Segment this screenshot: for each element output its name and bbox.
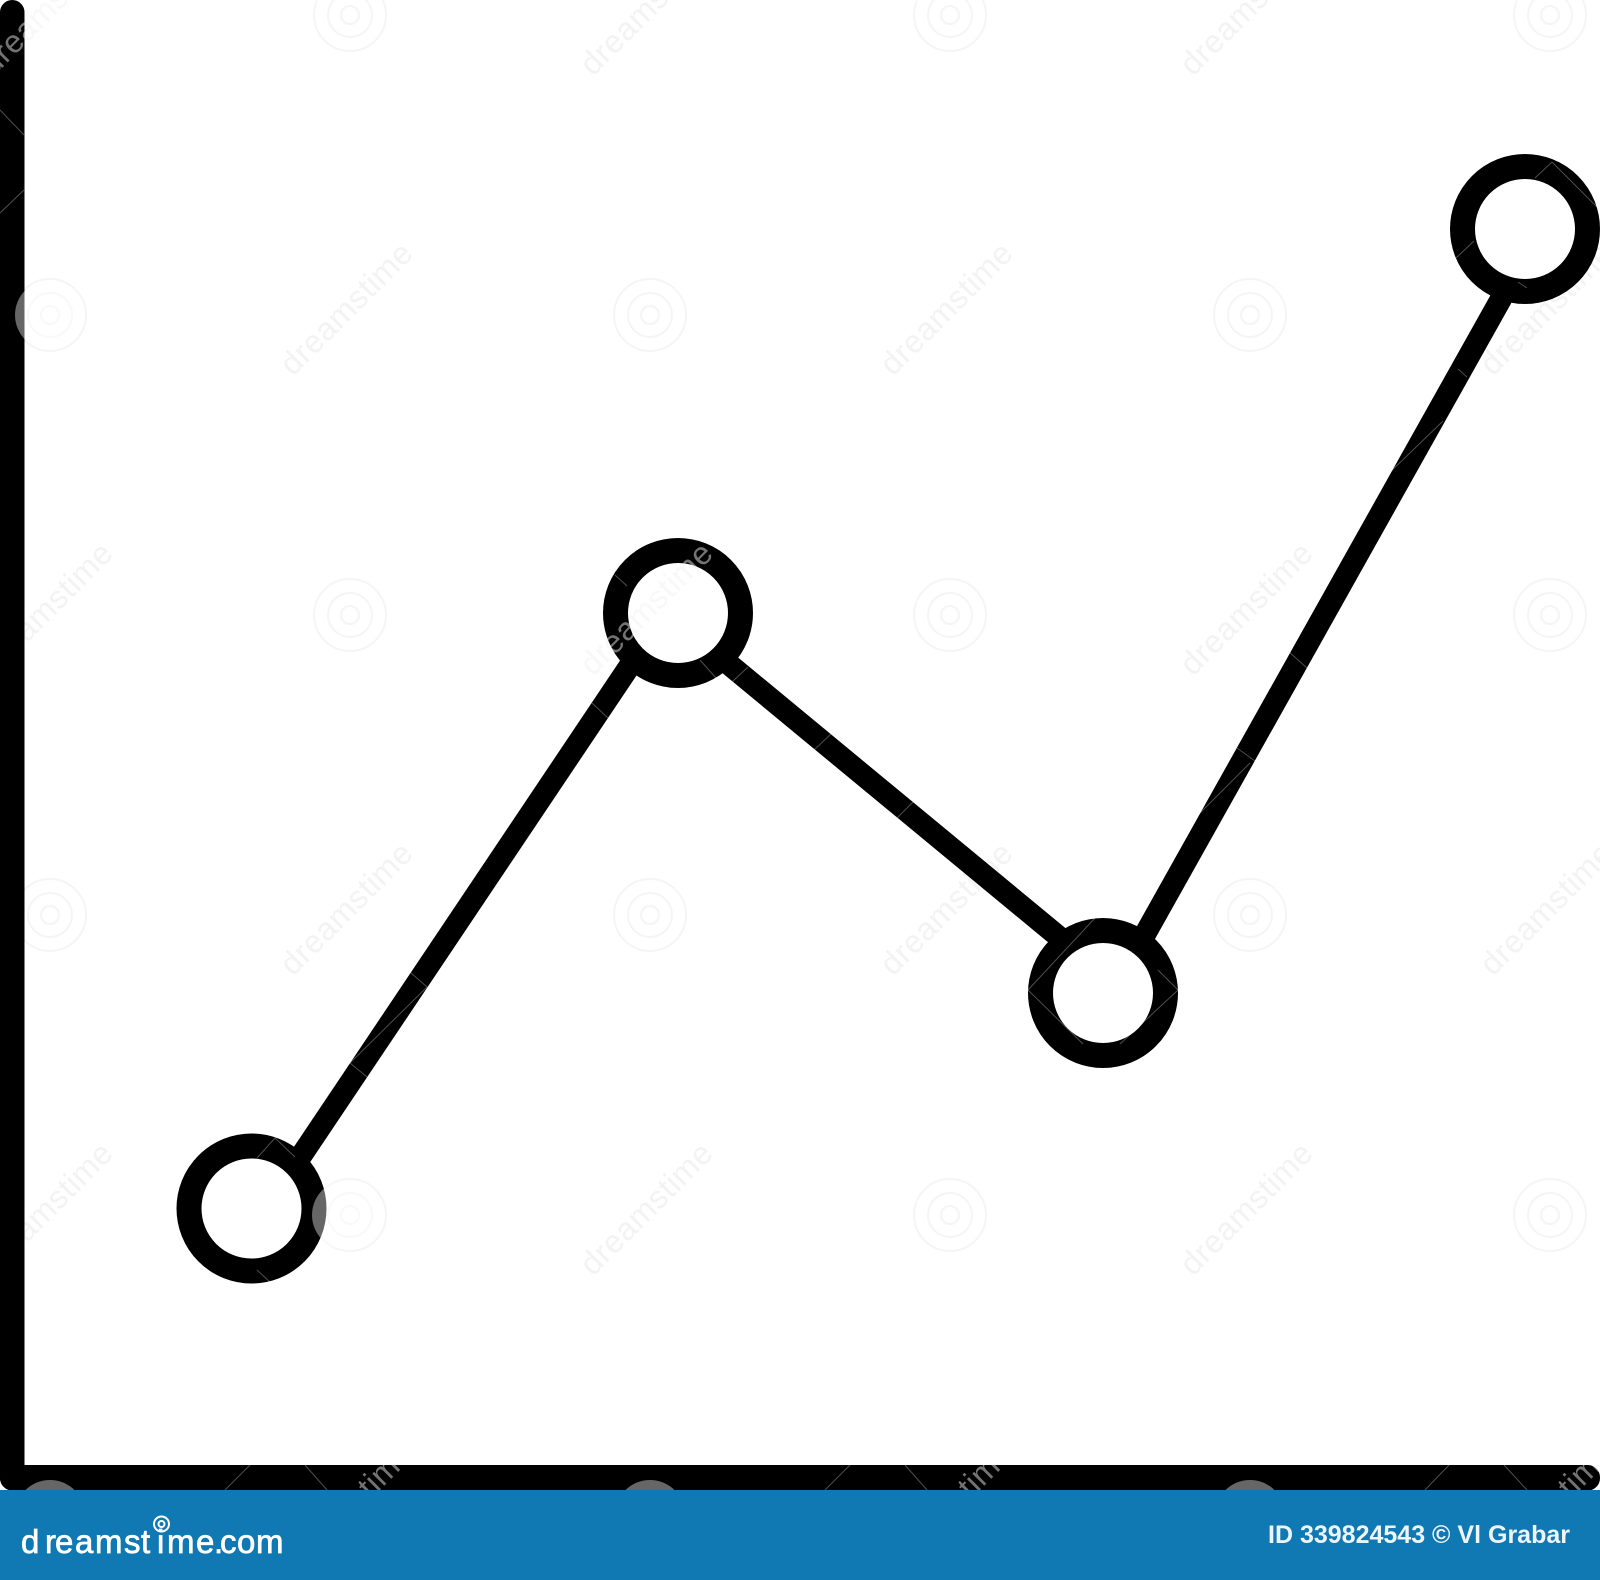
bottom banner: [0, 1490, 1600, 1580]
data line: [295, 290, 1506, 1165]
faint watermark layer on white: dreamstime: [572, 535, 720, 682]
icon: logo spiral: [154, 1516, 169, 1532]
faint watermark layer on white: dreamstime: [872, 835, 1020, 982]
faint watermark layer on white: dreamstime: [1172, 535, 1320, 682]
faint watermark layer on white: dreamstime: [572, 1135, 720, 1282]
watermark overlay visible on black shapes: dreamstime: [272, 1435, 420, 1580]
faint watermark layer on white: dreamstime: [272, 235, 420, 382]
faint watermark layer on white: dreamstime: [872, 235, 1020, 382]
segment 2 falling: [725, 661, 1065, 942]
point 1: [189, 1146, 314, 1271]
y axis: [0, 0, 24, 1490]
logo text: dreamstime.com: [21, 1523, 284, 1560]
image id and credit: ID 339824543 © Vl Grabar: [1268, 1521, 1570, 1549]
segment 1 rising: [295, 655, 637, 1165]
data points: [189, 166, 1588, 1271]
x axis: [0, 1465, 1600, 1490]
faint watermark layer on white: dreamstime: [272, 835, 420, 982]
point 3: [1040, 930, 1166, 1056]
watermark overlay visible on black shapes: dreamstime: [572, 535, 720, 682]
point 2: [616, 550, 740, 676]
faint watermark layer on white: dreamstime: [1172, 1135, 1320, 1282]
watermark overlay visible on black shapes: dreamstime: [872, 1435, 1020, 1580]
point 4: [1462, 166, 1588, 292]
segment 3 rising: [1139, 290, 1506, 945]
